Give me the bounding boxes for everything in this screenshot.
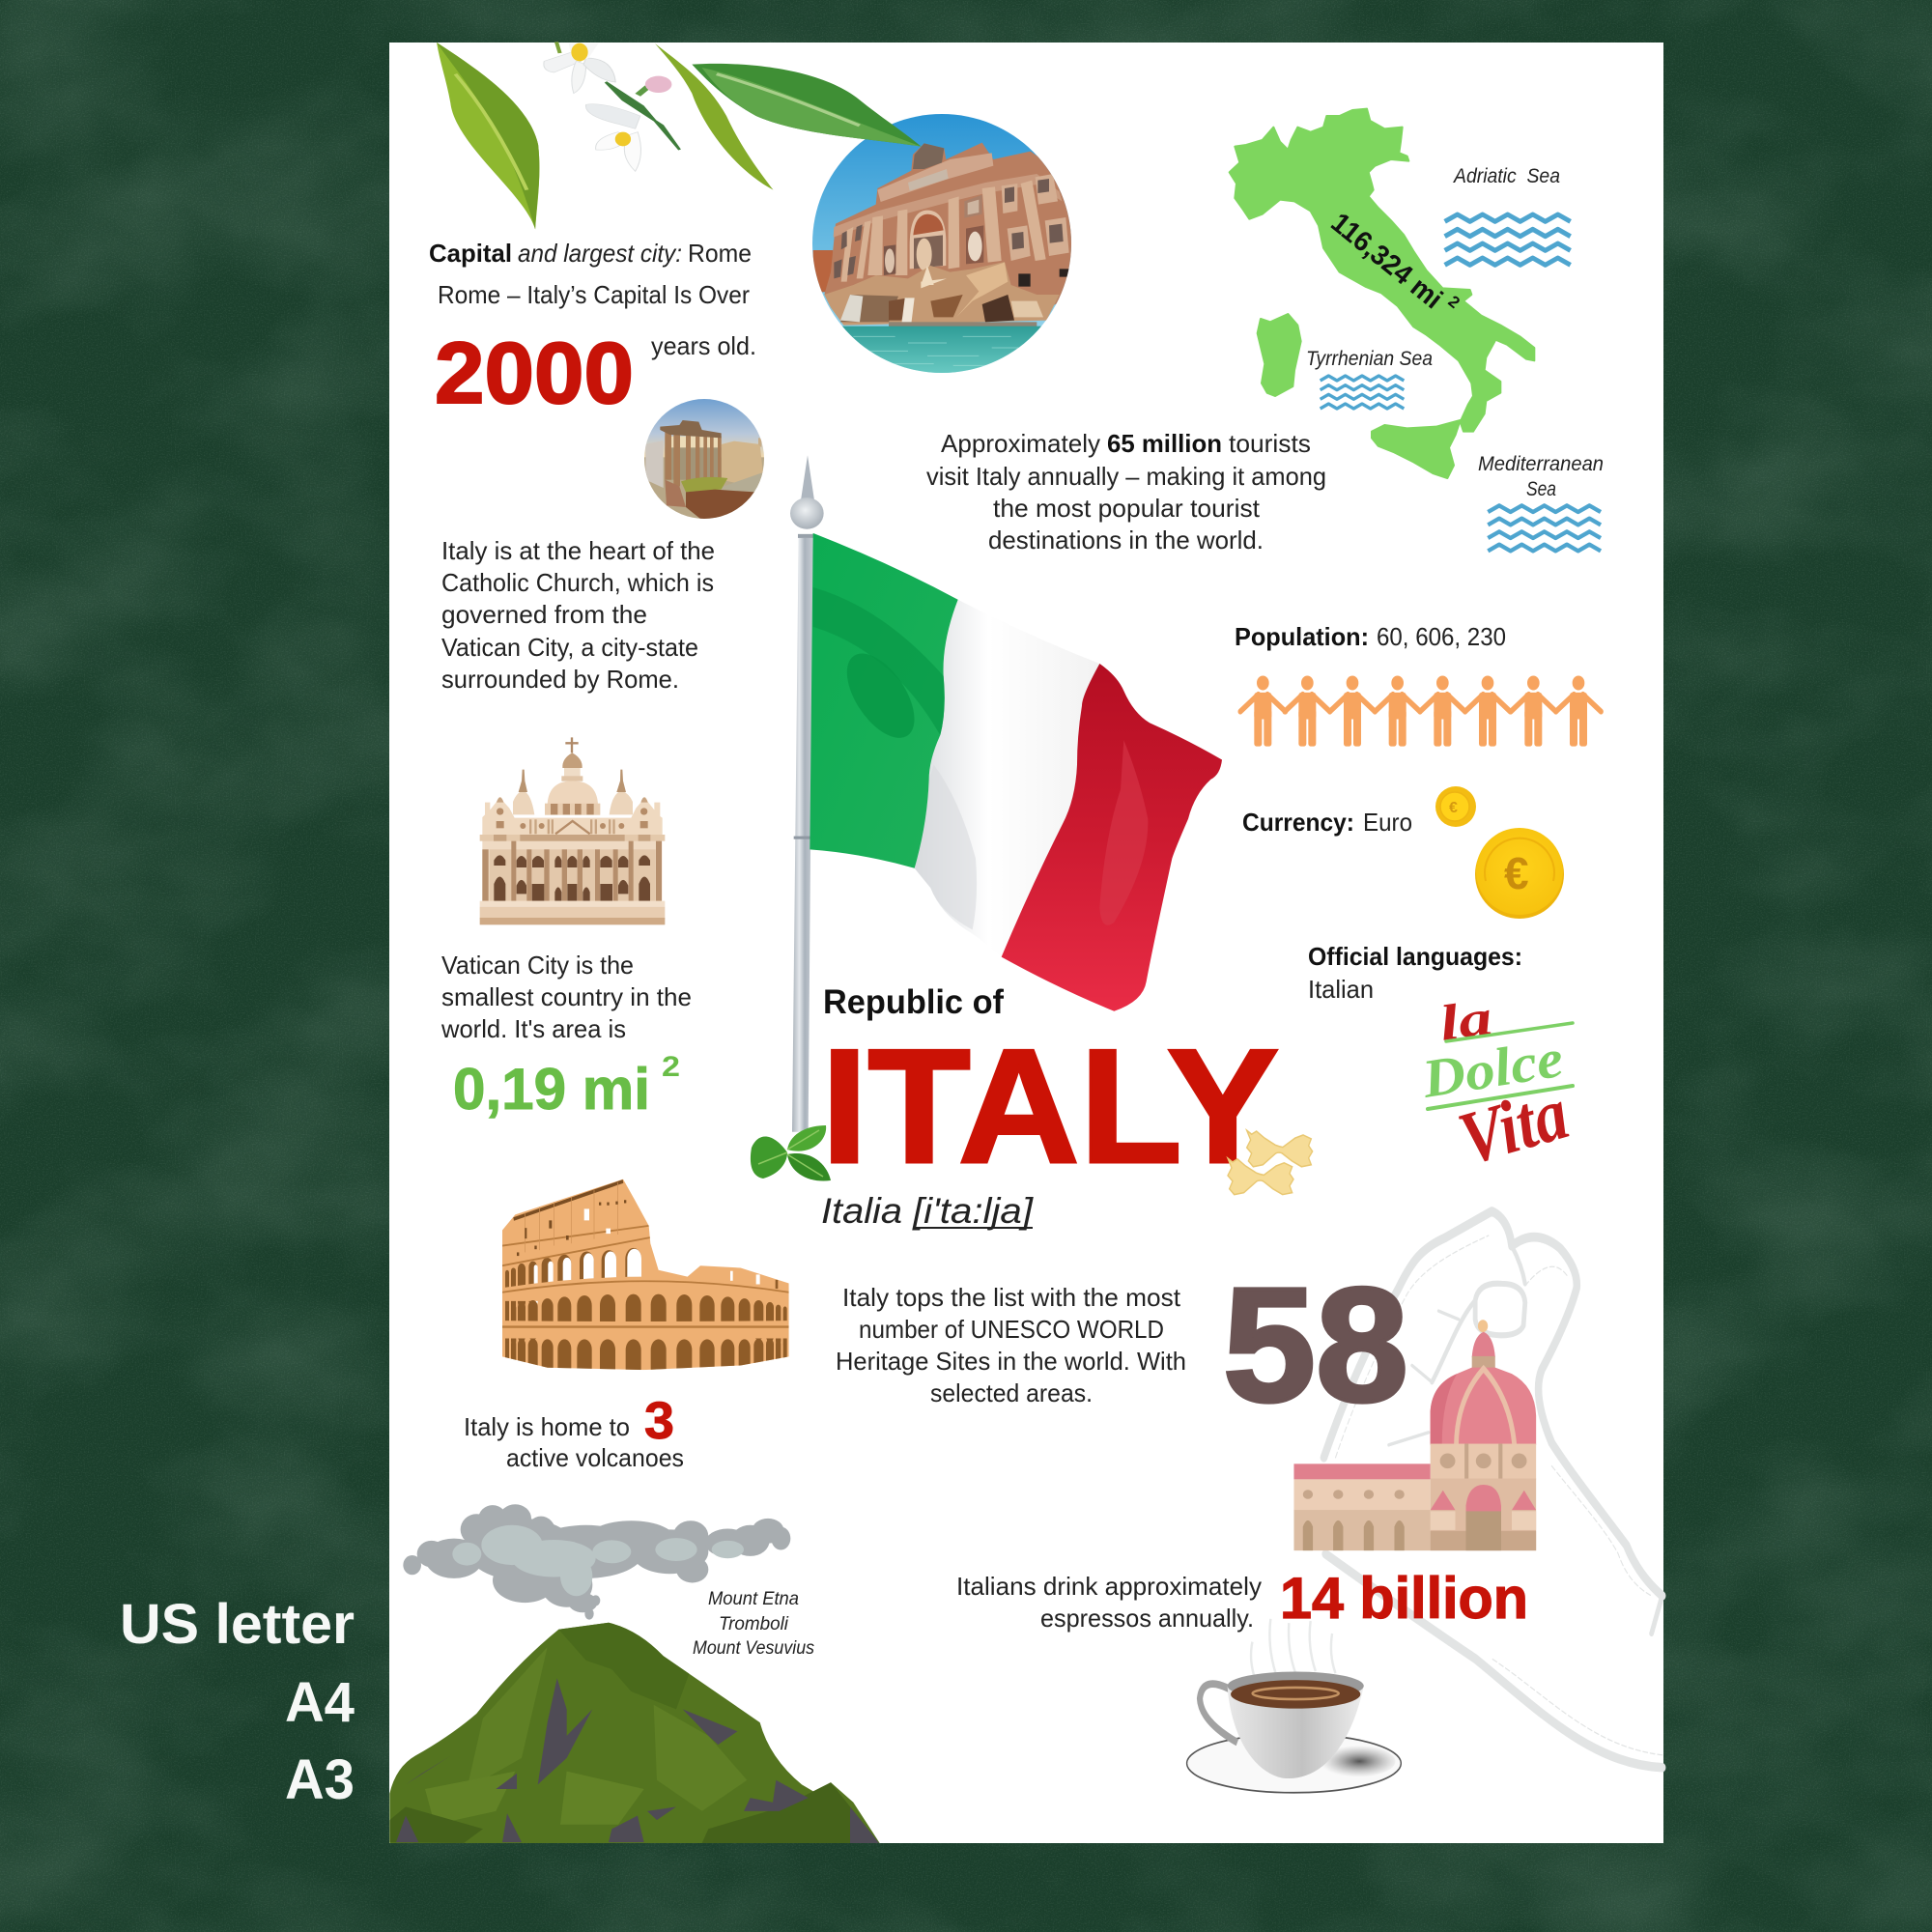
label: Tyrrhenian Sea: Tyrrhenian Sea [1306, 348, 1433, 370]
white poster panel [389, 43, 1663, 1843]
mainland [1230, 109, 1534, 432]
icon: watermark hand gesture [1323, 1211, 1662, 1768]
title: ITALY: ITALY [821, 1015, 1279, 1197]
saucer [1187, 1734, 1401, 1793]
text: espresso: espressos annually. [1040, 1604, 1254, 1633]
text: UNESCO sites: Italy tops the list with the most [842, 1283, 1181, 1312]
decoration: lemon branch with leaves and flowers [437, 42, 922, 229]
text: tourists: Approximately [941, 429, 1100, 458]
bottom row arches [505, 1339, 787, 1370]
lettering: la Dolce Vita [1417, 990, 1577, 1180]
stat: 0,19 square miles: 2 [662, 1051, 680, 1083]
text: tourists: the most popular tourist [993, 494, 1261, 523]
lettering: la Dolce Vita: la [1436, 990, 1495, 1052]
icon: basil leaves [751, 1125, 831, 1181]
text: capital: and largest city: [518, 239, 682, 268]
text: volcanoes: active volcanoes [506, 1443, 684, 1472]
flower stem and bud [556, 42, 680, 150]
icon: small euro coin [1435, 786, 1476, 827]
label: area of Italy: 116,324 mi [1325, 208, 1448, 315]
icon: large euro coin: € [1504, 848, 1529, 898]
stat: 2000 years: 2000 [435, 326, 634, 422]
text: Catholic Church: Vatican City, a city-state [441, 633, 698, 662]
text: espresso [956, 1572, 1262, 1633]
palace facade [824, 143, 1074, 317]
text: capital [429, 239, 756, 360]
icon: Adriatic waves [1445, 214, 1571, 265]
text: currency [1242, 808, 1412, 837]
text: currency: Euro [1363, 808, 1412, 837]
red stripe [1002, 664, 1222, 1011]
text: official languages [1308, 942, 1522, 1004]
cup body [1228, 1686, 1364, 1778]
subtitle: Italia pronunciation [821, 1191, 1034, 1231]
large leaf [692, 64, 922, 147]
labels: three volcanoes [693, 1589, 814, 1659]
icon: Colosseum [499, 1177, 792, 1381]
text: population [1235, 622, 1506, 651]
white stripe [915, 600, 1099, 957]
icon: espresso cup [1187, 1619, 1401, 1793]
stat: 14 billion: 14 billion [1280, 1566, 1528, 1631]
icon: small euro coin: € [1449, 800, 1458, 816]
central niche [910, 211, 946, 269]
text: population: Population: [1235, 622, 1369, 651]
text: tourists [926, 429, 1326, 554]
icon: Italian flag [810, 533, 1222, 1011]
left leaf [437, 43, 539, 229]
stat: 0,19 square miles: 0,19 mi [453, 1057, 650, 1122]
text: volcanoes: Italy is home to [464, 1412, 630, 1441]
text: population: 60, 606, 230 [1377, 622, 1506, 651]
text: capital: Rome [688, 239, 752, 268]
text: capital: Capital [429, 239, 512, 268]
middle row arches [505, 1294, 787, 1347]
text: Vatican City [440, 951, 692, 1043]
side label: paper sizes [120, 1593, 355, 1811]
label: Mediterranean Sea [1478, 453, 1604, 500]
text: tourists: tourists [1229, 429, 1311, 458]
icon: row of people [1240, 675, 1601, 747]
windows [1002, 174, 1069, 261]
text: UNESCO sites: selected areas. [930, 1378, 1093, 1407]
side statues [884, 244, 895, 275]
text: Vatican City: smallest country in the [441, 982, 692, 1011]
text: capital: years old. [651, 331, 756, 360]
green stripe [810, 533, 958, 868]
icon: volcano mountain [389, 1623, 880, 1843]
label: area of Italy: 2 [1444, 292, 1463, 312]
top flower [544, 43, 615, 94]
text: official languages: Italian [1308, 975, 1374, 1004]
left side building [813, 250, 833, 292]
subtitle: Italia pronunciation: [i'ta:lja] [912, 1191, 1034, 1231]
lettering: la Dolce Vita: Dolce [1417, 1029, 1567, 1110]
photo: Roman Forum [642, 398, 766, 525]
text: volcanoes [464, 1392, 684, 1472]
text: espresso: Italians drink approximately [956, 1572, 1262, 1601]
Sicily [1372, 420, 1461, 478]
label: Adriatic Sea: Adriatic Sea [1452, 165, 1560, 187]
icon: St Peter's Basilica [480, 737, 665, 924]
text: Catholic Church: Catholic Church, which is [441, 568, 714, 597]
text: Catholic Church: Italy is at the heart of the [441, 536, 715, 565]
lettering: la Dolce Vita: Vita [1450, 1070, 1577, 1180]
text: UNESCO sites [836, 1283, 1186, 1407]
text: tourists: 65 million [1107, 429, 1222, 458]
text: capital: Rome – Italy’s Capital Is Over [438, 280, 750, 309]
text: Vatican City: world. It's area is [440, 1014, 626, 1043]
lower flower [585, 104, 640, 171]
icon: Mediterranean waves [1488, 505, 1601, 551]
labels: three volcanoes: Mount Etna [708, 1589, 799, 1609]
photo: Trevi Fountain [812, 114, 1074, 378]
text: tourists: destinations in the world. [988, 526, 1264, 554]
side label: paper sizes: A4 [285, 1671, 355, 1734]
text: Catholic Church: governed from the [441, 600, 647, 629]
rocks [824, 262, 1060, 326]
top row arches [505, 1248, 641, 1315]
text: currency: Currency: [1242, 808, 1354, 837]
icon: Florence Cathedral [1293, 1320, 1536, 1550]
icon: flagpole [790, 455, 824, 1132]
labels: three volcanoes: Mount Vesuvius [693, 1638, 814, 1659]
icon: volcano smoke [403, 1504, 790, 1620]
heading: Republic of: Republic of [823, 983, 1004, 1021]
label: Mediterranean Sea: Mediterranean [1478, 453, 1604, 475]
labels: three volcanoes: Tromboli [719, 1614, 789, 1634]
text: official languages: Official languages: [1308, 942, 1522, 971]
long thin leaf [655, 43, 774, 190]
upper wall details [505, 1277, 641, 1301]
text: UNESCO sites: number of UNESCO WORLD [859, 1315, 1164, 1344]
subtitle: Italia pronunciation: Italia [821, 1191, 902, 1231]
stat: 58: 58 [1223, 1254, 1408, 1435]
map: Italy [1230, 109, 1534, 478]
icon: pasta farfalle [1228, 1130, 1313, 1195]
Sardinia [1258, 314, 1301, 396]
text: Catholic Church [441, 536, 715, 694]
label: Mediterranean Sea: Sea [1526, 478, 1556, 500]
icon: Tyrrhenian waves [1321, 376, 1404, 409]
text: Catholic Church: surrounded by Rome. [441, 665, 679, 694]
steam [1251, 1619, 1336, 1675]
side label: paper sizes: A3 [285, 1748, 355, 1811]
text: tourists: visit Italy annually – making it among [926, 462, 1326, 491]
text: Vatican City: Vatican City is the [441, 951, 634, 980]
water [842, 327, 1041, 373]
text: volcanoes: 3 [644, 1392, 674, 1450]
handle [1200, 1684, 1237, 1743]
text: UNESCO sites: Heritage Sites in the world. With [836, 1347, 1186, 1376]
side label: paper sizes: US letter [120, 1593, 355, 1656]
icon: large euro coin [1475, 828, 1564, 919]
